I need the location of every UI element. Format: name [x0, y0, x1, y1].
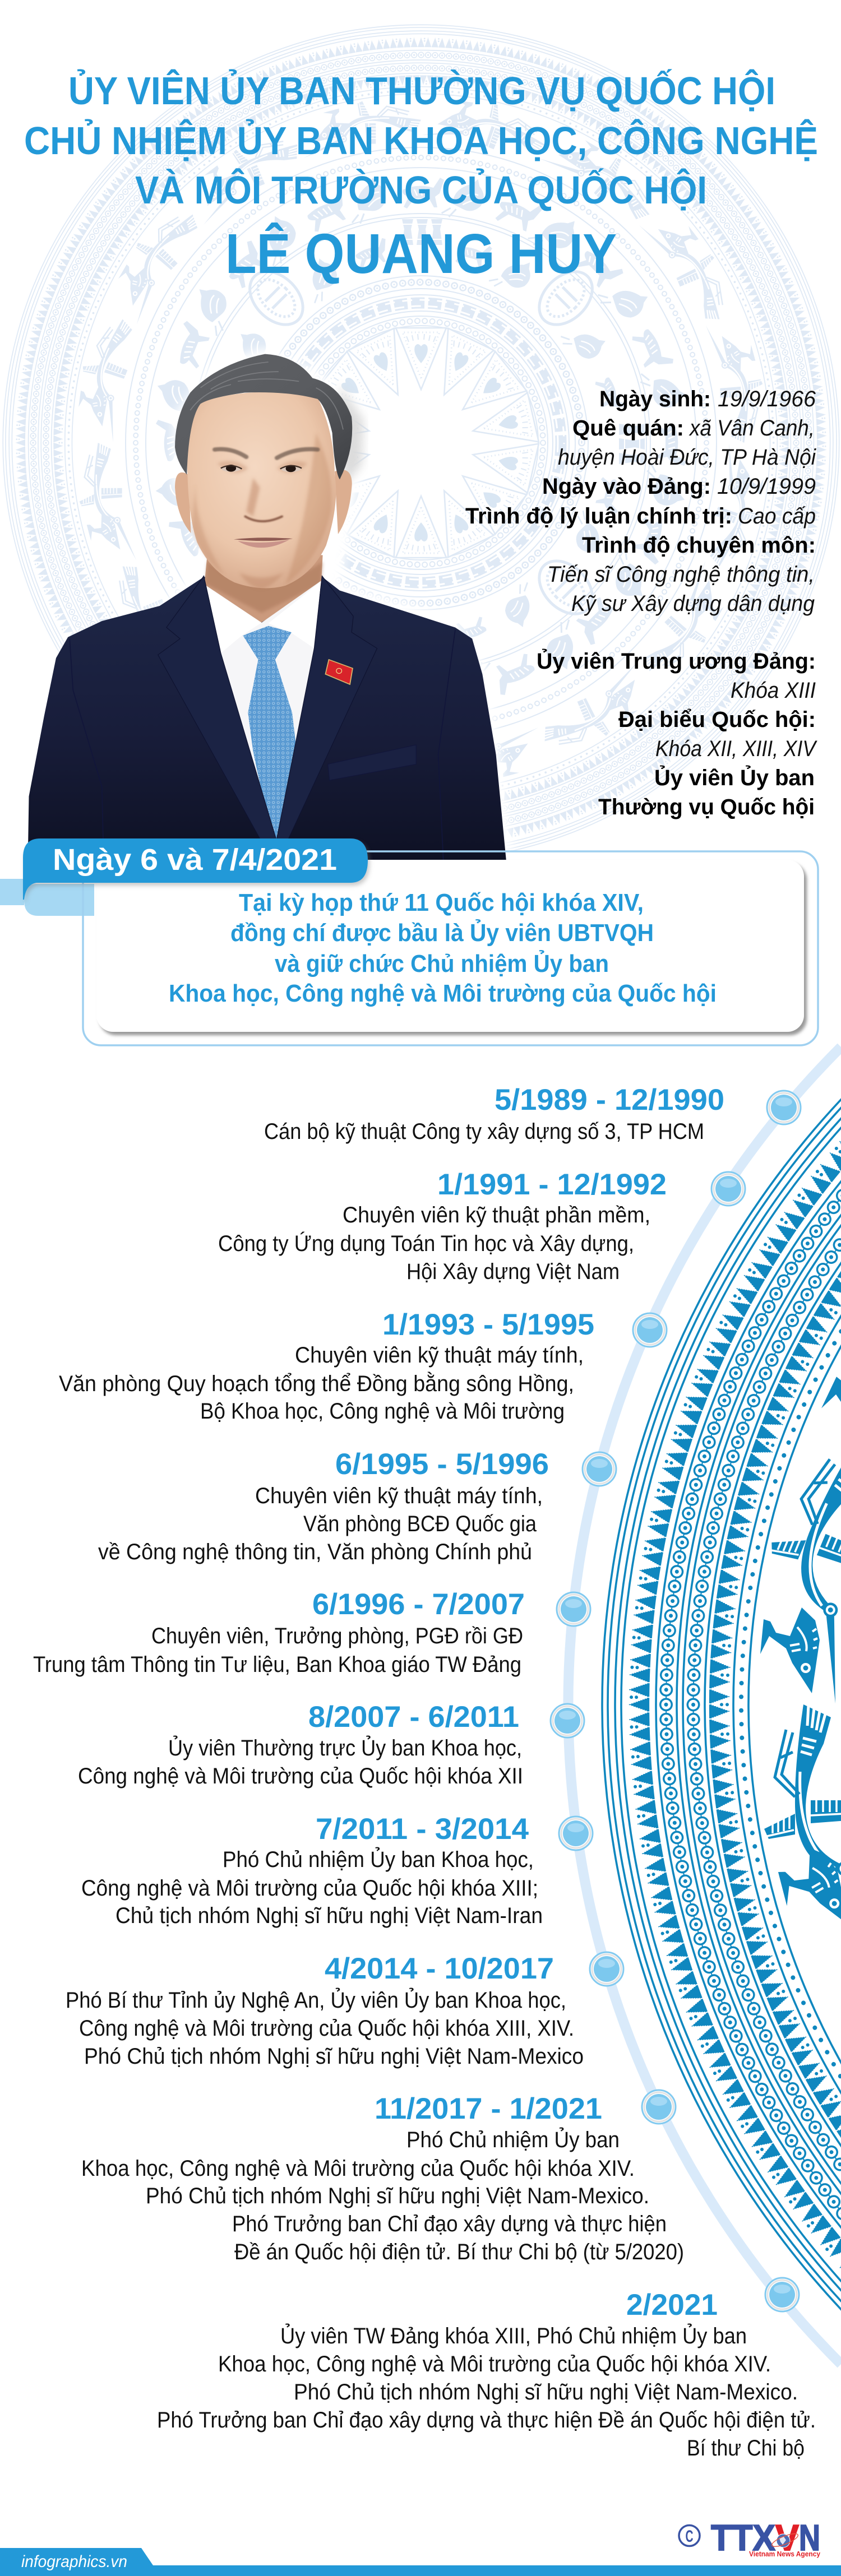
- timeline entry: 2/2021: Ủy viên TW Đảng khóa XIII, Phó Chủ nhiệm Ủy ban: [280, 2323, 747, 2348]
- timeline entry: 2/2021: Bí thư Chi bộ: [687, 2436, 805, 2461]
- lapels: [158, 576, 276, 860]
- home town: Quê quán:: [572, 416, 684, 441]
- timeline entry: 1/1993 - 5/1995: [59, 1308, 667, 1424]
- title: position and committee: [24, 68, 818, 212]
- outer frame: [83, 851, 818, 1045]
- white card: [96, 860, 804, 1032]
- background: large bronze drum arc, right side: [602, 819, 841, 2576]
- pocket: [328, 745, 416, 780]
- timeline entry: 11/2017 - 1/2021: 11/2017 - 1/2021: [375, 2092, 602, 2125]
- home town: [558, 416, 816, 470]
- political theory level: Cao cấp: [738, 504, 816, 529]
- timeline entry: 7/2011 - 3/2014: Phó Chủ nhiệm Ủy ban Khoa học,: [223, 1846, 534, 1872]
- timeline entry: 5/1989 - 12/1990: 5/1989 - 12/1990: [495, 1083, 724, 1116]
- timeline entry: 1/1993 - 5/1995: 1/1993 - 5/1995: [382, 1308, 594, 1341]
- national assembly deputy: Đại biểu Quốc hội:: [618, 707, 816, 732]
- standing committee: Ủy viên Ủy ban: [654, 765, 815, 790]
- shirt: [204, 581, 321, 860]
- timeline entry: 4/2014 - 10/2017: 4/2014 - 10/2017: [325, 1952, 554, 1985]
- head: [175, 470, 352, 534]
- professional level: Kỹ sư Xây dựng dân dụng: [571, 591, 815, 616]
- timeline entry: 8/2007 - 6/2011: Công nghệ và Môi trường của Quốc hội khóa XII: [78, 1764, 523, 1789]
- agency name: Vietnam News Agency: [749, 2550, 821, 2558]
- timeline entry: 5/1989 - 12/1990: [264, 1083, 801, 1144]
- national assembly deputy: [618, 707, 817, 761]
- timeline entry: 4/2014 - 10/2017: Phó Bí thư Tỉnh ủy Nghệ An, Ủy viên Ủy ban Khoa học,: [66, 1987, 566, 2013]
- timeline entry: 1/1991 - 12/1992: Chuyên viên kỹ thuật phần mềm,: [343, 1203, 650, 1227]
- callout text: và giữ chức Chủ nhiệm Ủy ban: [275, 949, 609, 977]
- central committee: Khóa XIII: [731, 678, 816, 703]
- timeline entry: 1/1991 - 12/1992: [218, 1168, 745, 1284]
- bio text block: [465, 387, 817, 819]
- standing committee: [598, 765, 815, 819]
- timeline entry: 8/2007 - 6/2011: Ủy viên Thường trực Ủy ban Khoa học,: [168, 1735, 522, 1760]
- timeline entry: 2/2021: 2/2021: [626, 2288, 718, 2322]
- face shading: [192, 433, 332, 589]
- footer site name: infographics.vn: [21, 2552, 127, 2571]
- callout text: [169, 889, 717, 1007]
- timeline entry: 1/1993 - 5/1995: Chuyên viên kỹ thuật máy tính,: [295, 1343, 584, 1368]
- footer band: [0, 2548, 841, 2576]
- panel: election callout: [0, 838, 818, 1045]
- badge: party flag: [325, 660, 353, 684]
- copyright mark: [679, 2526, 700, 2546]
- callout text: Khoa học, Công nghệ và Môi trường của Quốc hội: [169, 980, 717, 1007]
- timeline entry: 11/2017 - 1/2021: [81, 2090, 684, 2264]
- timeline entry: 7/2011 - 3/2014: Công nghệ và Môi trường của Quốc hội khóa XIII;: [81, 1876, 538, 1901]
- date text: Ngày 6 và 7/4/2021: [53, 843, 337, 877]
- timeline entry: 11/2017 - 1/2021: Phó Chủ tịch nhóm Nghị sĩ hữu nghị Việt Nam-Mexico.: [146, 2184, 649, 2208]
- title: position and committee: ỦY VIÊN ỦY BAN THƯỜNG VỤ QUỐC HỘI: [68, 68, 775, 113]
- timeline entry: 1/1991 - 12/1992: Hội Xây dựng Việt Nam: [406, 1259, 620, 1284]
- timeline entry: 4/2014 - 10/2017: Phó Chủ tịch nhóm Nghị sĩ hữu nghị Việt Nam-Mexico: [84, 2044, 584, 2069]
- timeline entry: 8/2007 - 6/2011: [78, 1701, 584, 1789]
- timeline entry: 7/2011 - 3/2014: [81, 1813, 593, 1928]
- timeline entry: 6/1995 - 5/1996: [98, 1448, 616, 1564]
- timeline entry: 8/2007 - 6/2011: 8/2007 - 6/2011: [308, 1701, 519, 1734]
- timeline entry: 6/1996 - 7/2007: Chuyên viên, Trưởng phòng, PGĐ rồi GĐ: [151, 1624, 523, 1648]
- timeline arc: [568, 1047, 841, 2364]
- heading: name: LÊ QUANG HUY: [225, 223, 617, 285]
- birth date: Ngày sinh:: [599, 387, 711, 411]
- background: pale bronze drum pattern: [3, 25, 839, 861]
- agency letters: TTX: [711, 2517, 775, 2558]
- suit: [28, 576, 506, 860]
- timeline entry: 11/2017 - 1/2021: Đề án Quốc hội điện tử. Bí thư Chi bộ (từ 5/2020): [234, 2240, 684, 2264]
- central committee: [537, 648, 816, 703]
- tie: [243, 626, 295, 851]
- portrait: Lê Quang Huy: [20, 348, 513, 860]
- timeline entry: 1/1993 - 5/1995: Văn phòng Quy hoạch tổng thể Đồng bằng sông Hồng,: [59, 1371, 574, 1396]
- timeline entry: 11/2017 - 1/2021: Phó Trưởng ban Chỉ đạo xây dựng và thực hiện: [232, 2212, 667, 2236]
- timeline entry: 6/1995 - 5/1996: 6/1995 - 5/1996: [335, 1448, 549, 1481]
- timeline entry: 7/2011 - 3/2014: 7/2011 - 3/2014: [316, 1813, 529, 1846]
- timeline entry: 6/1995 - 5/1996: Văn phòng BCĐ Quốc gia: [303, 1512, 537, 1536]
- party entry date: 10/9/1999: [717, 474, 816, 499]
- political theory level: Trình độ lý luận chính trị:: [465, 504, 732, 529]
- timeline entry: 6/1995 - 5/1996: Chuyên viên kỹ thuật máy tính,: [255, 1484, 543, 1508]
- timeline entry: 2/2021: Phó Chủ tịch nhóm Nghị sĩ hữu nghị Việt Nam-Mexico.: [294, 2380, 798, 2404]
- birth date: [599, 387, 816, 411]
- professional level: Trình độ chuyên môn:: [582, 533, 816, 558]
- professional level: Tiến sĩ Công nghệ thông tin,: [547, 562, 815, 587]
- timeline entry: 5/1989 - 12/1990: Cán bộ kỹ thuật Công ty xây dựng số 3, TP HCM: [264, 1119, 704, 1144]
- timeline entry: 11/2017 - 1/2021: Phó Chủ nhiệm Ủy ban: [406, 2126, 620, 2152]
- home town: huyện Hoài Đức, TP Hà Nội: [558, 445, 816, 470]
- home town: xã Vân Canh,: [688, 416, 815, 441]
- neck: [204, 555, 323, 624]
- timeline entry: 6/1996 - 7/2007: Trung tâm Thông tin Tư liệu, Ban Khoa giáo TW Đảng: [33, 1652, 521, 1677]
- birth date: 19/9/1966: [718, 387, 816, 411]
- copyright mark: C: [685, 2527, 693, 2546]
- title: position and committee: VÀ MÔI TRƯỜNG CỦA QUỐC HỘI: [135, 168, 707, 212]
- callout text: đồng chí được bầu là Ủy viên UBTVQH: [230, 918, 654, 947]
- timeline entry: 2/2021: [157, 2278, 816, 2461]
- national assembly deputy: Khóa XII, XIII, XIV: [655, 736, 817, 761]
- callout text: Tại kỳ họp thứ 11 Quốc hội khóa XIV,: [239, 889, 644, 916]
- timeline entry: 6/1996 - 7/2007: [33, 1588, 590, 1677]
- timeline entry: 1/1991 - 12/1992: Công ty Ứng dụng Toán Tin học và Xây dựng,: [218, 1231, 634, 1256]
- professional level: [547, 533, 816, 616]
- timeline entry: 4/2014 - 10/2017: [66, 1952, 623, 2069]
- agency letters: N: [799, 2517, 820, 2558]
- central committee: Ủy viên Trung ương Đảng:: [537, 648, 816, 674]
- timeline entry: 7/2011 - 3/2014: Chủ tịch nhóm Nghị sĩ hữu nghị Việt Nam-Iran: [115, 1903, 543, 1928]
- standing committee: Thường vụ Quốc hội: [598, 795, 815, 819]
- timeline entry: 1/1993 - 5/1995: Bộ Khoa học, Công nghệ và Môi trường: [200, 1399, 565, 1424]
- agency letters: V: [775, 2517, 799, 2558]
- globe with orbit: [770, 2531, 800, 2549]
- ribbon fold: [0, 879, 94, 916]
- timeline entry: 2/2021: Khoa học, Công nghệ và Môi trường của Quốc hội khóa XIV.: [218, 2352, 771, 2376]
- date tab: [23, 838, 368, 900]
- timeline entry: 1/1991 - 12/1992: 1/1991 - 12/1992: [437, 1168, 667, 1201]
- timeline entry: 11/2017 - 1/2021: Khoa học, Công nghệ và Môi trường của Quốc hội khóa XIV.: [81, 2156, 635, 2181]
- logo: TTXVN Vietnam News Agency: [679, 2517, 821, 2558]
- timeline entry: 6/1995 - 5/1996: về Công nghệ thông tin, Văn phòng Chính phủ: [98, 1540, 532, 1564]
- hair: [175, 354, 352, 479]
- timeline entry: 6/1996 - 7/2007: 6/1996 - 7/2007: [312, 1588, 525, 1621]
- party entry date: Ngày vào Đảng:: [542, 474, 711, 499]
- party entry date: [542, 474, 816, 499]
- timeline entry: 4/2014 - 10/2017: Công nghệ và Môi trường của Quốc hội khóa XIII, XIV.: [79, 2016, 574, 2041]
- agency letters: [711, 2517, 820, 2558]
